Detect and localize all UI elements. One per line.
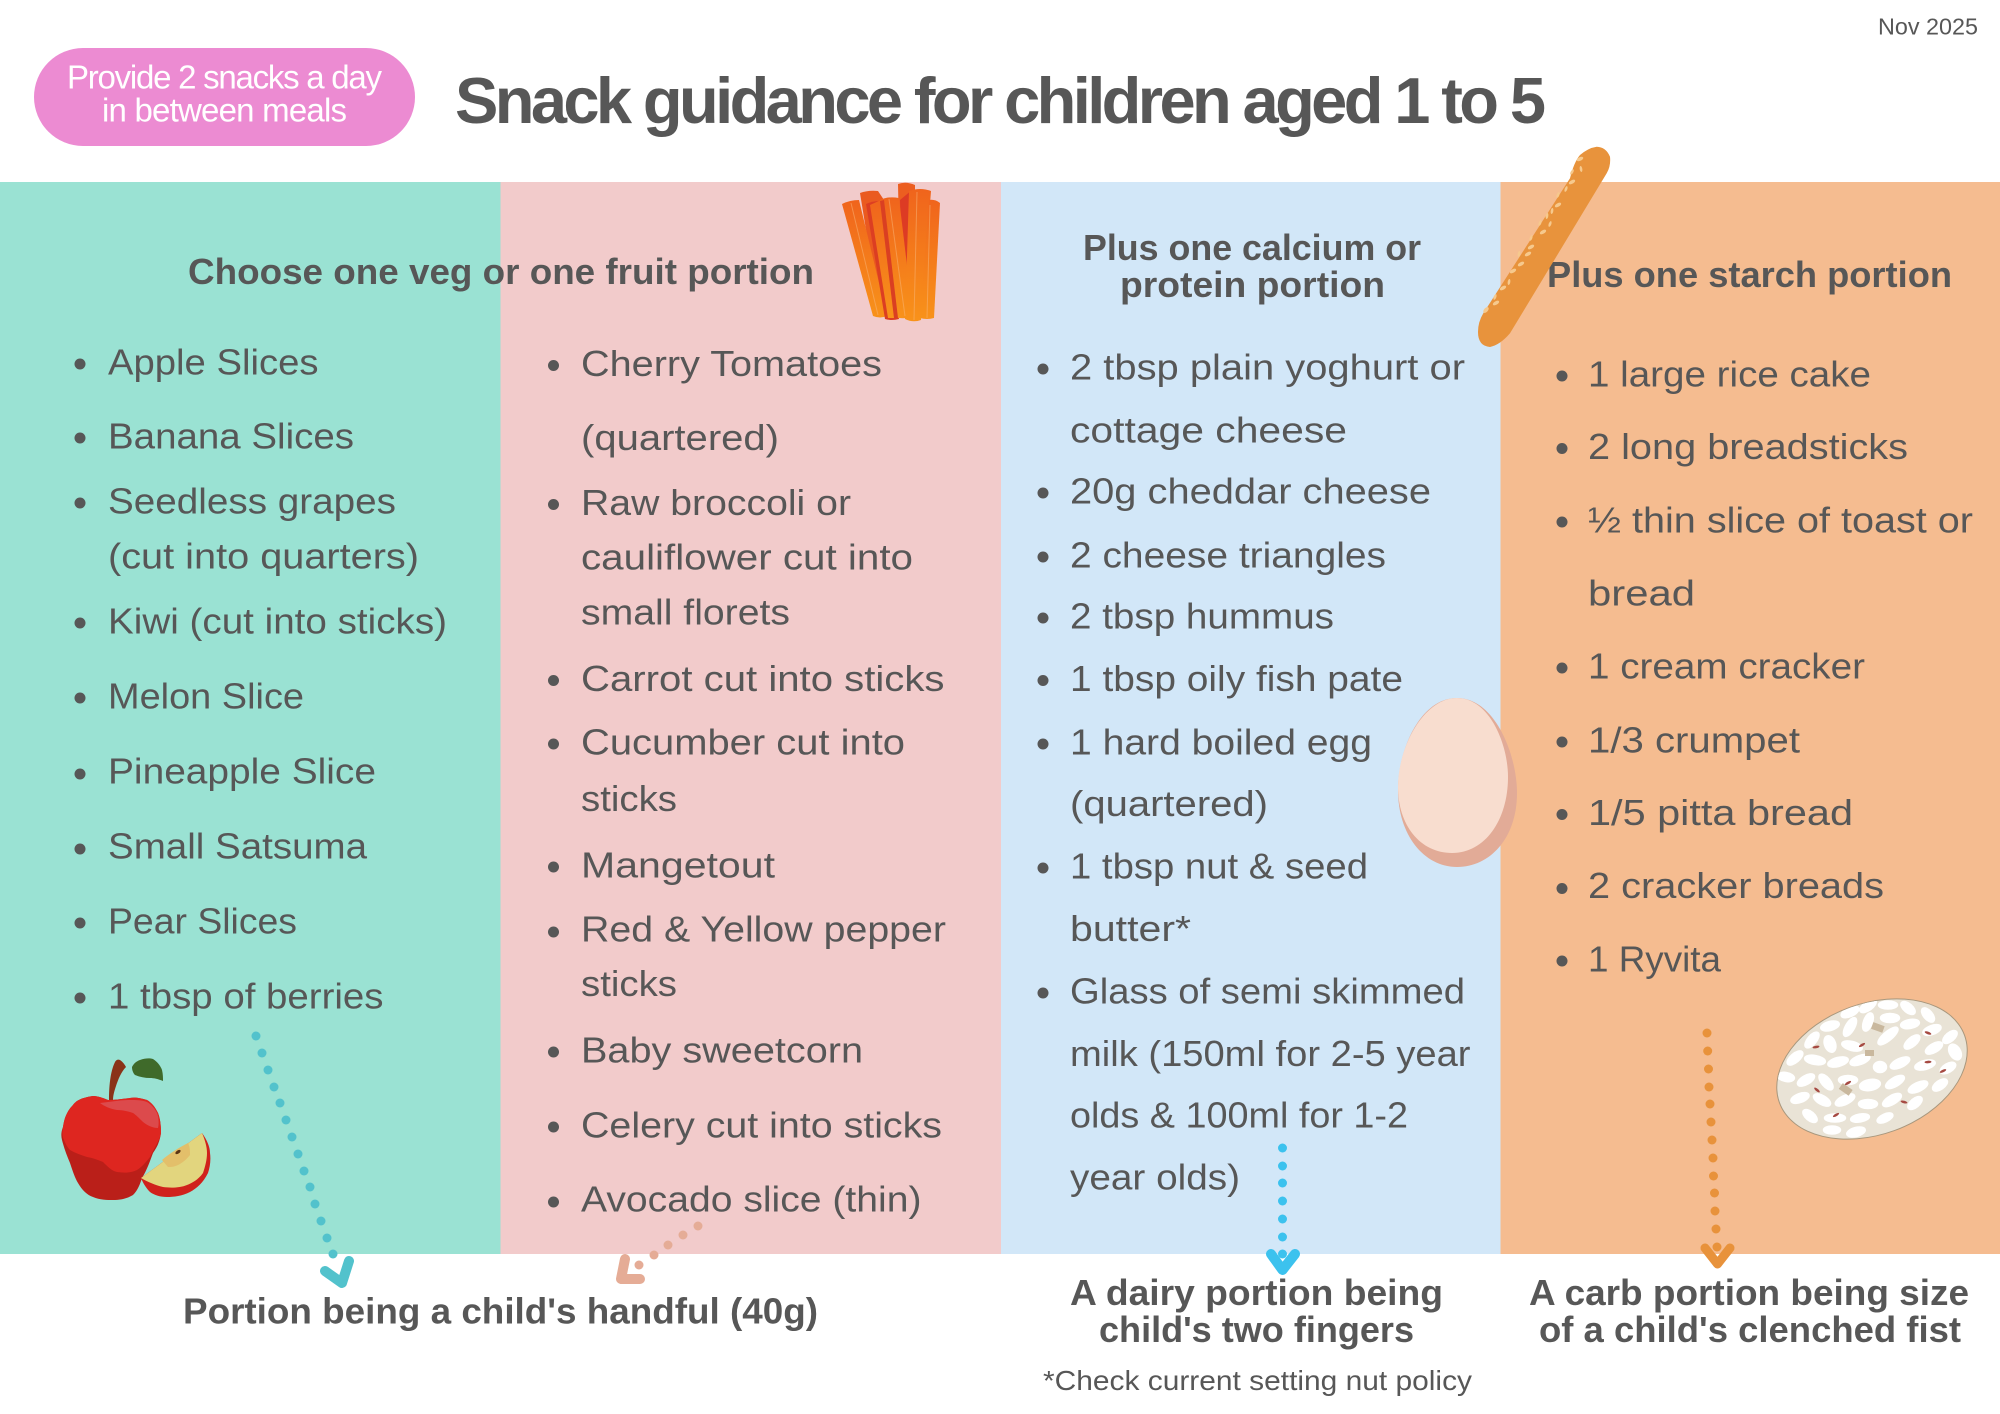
panel: vegetable portions: sticks [581,778,677,819]
panel: calcium or protein portions: (quartered) [1070,783,1268,824]
arrow: pink dotted [621,1222,702,1279]
panel: vegetable portions: (quartered) [581,417,779,458]
panel: starch portions: ½ thin slice of toast or [1588,500,1973,540]
icon: apple with slice [61,1058,210,1200]
panel: fruit portions [0,182,501,1254]
panel: fruit portions: 1 tbsp of berries [108,976,384,1016]
callout pill: provide 2 snacks a day: in between meals [102,92,347,128]
panel: vegetable portions: Red & Yellow pepper [581,908,946,950]
panel: starch portions: bread [1588,572,1695,614]
panel: calcium or protein portions: cottage cheese [1070,410,1347,450]
caption: carb portion: A carb portion being size [1529,1272,1969,1313]
arrow: blue dotted [1271,1144,1295,1270]
panel: starch portions: 1/5 pitta bread [1588,792,1853,833]
heading: veg or fruit: Choose one veg or one fruit portion [188,251,814,292]
panel: vegetable portions: Baby sweetcorn [581,1030,863,1070]
caption: carb portion [1529,1272,1969,1350]
panel: vegetable portions [500,182,1001,1254]
panel: calcium or protein portions: 20g cheddar cheese [1070,470,1431,512]
caption: dairy portion: child's two fingers [1099,1309,1414,1350]
icon: carrot sticks [842,183,940,321]
arrow: orange dotted [1702,1028,1730,1264]
panel: vegetable portions: Carrot cut into sticks [581,658,944,699]
panel: fruit portions: Pear Slices [108,900,297,942]
panel: fruit portions: Seedless grapes [108,480,396,522]
heading: calcium or protein: protein portion [1120,264,1385,305]
panel: calcium or protein portions: 1 tbsp oily fish pate [1070,658,1403,699]
panel: vegetable portions: Avocado slice (thin) [581,1178,922,1220]
panel: vegetable portions: Mangetout [581,844,775,886]
heading: calcium or protein: Plus one calcium or [1083,227,1421,268]
panel: fruit portions: Banana Slices [108,416,354,456]
panel: calcium or protein portions: 2 tbsp hummus [1070,596,1334,636]
panel: starch portions: 1/3 crumpet [1588,720,1800,760]
heading: calcium or protein [1083,227,1421,305]
panel: calcium or protein portions: 2 tbsp plain yoghurt or [1070,346,1465,388]
caption: carb portion: of a child's clenched fist [1539,1309,1961,1350]
panel: calcium or protein portions: Glass of semi skimmed [1070,970,1465,1012]
panel: vegetable portions: cauliflower cut into [581,536,913,578]
panel: calcium or protein portions: butter* [1070,908,1191,949]
panel: starch portions [1500,182,2000,1254]
date label: Nov 2025 [1878,14,1978,40]
title: Snack guidance for children aged 1 to 5 [455,64,1546,137]
panel: starch portions: 2 long breadsticks [1588,426,1908,467]
callout pill: provide 2 snacks a day: Provide 2 snacks a day [67,58,382,96]
caption: dairy portion [1070,1272,1443,1350]
heading: starch: Plus one starch portion [1547,254,1952,295]
footnote: nut policy: *Check current setting nut policy [1043,1365,1472,1396]
caption: handful portion: Portion being a child's handful (40g) [183,1290,818,1332]
icon: breadstick [1478,147,1610,347]
panel: vegetable portions: small florets [581,592,790,632]
icon: boiled egg [1398,698,1517,867]
panel: calcium or protein portions: 2 cheese triangles [1070,534,1386,576]
icon: rice cake [1776,998,1968,1140]
panel: starch portions: 1 cream cracker [1588,646,1865,686]
panel: calcium or protein portions: year olds) [1070,1156,1240,1198]
panel: fruit portions: Pineapple Slice [108,750,376,792]
panel: vegetable portions: Cucumber cut into [581,722,905,762]
panel: calcium or protein portions: 1 tbsp nut & seed [1070,846,1368,886]
panel: fruit portions: Apple Slices [108,342,318,382]
arrow: teal dotted [252,1032,349,1283]
panel: fruit portions: (cut into quarters) [108,536,419,576]
panel: vegetable portions: sticks [581,963,677,1004]
panel: starch portions: 1 large rice cake [1588,354,1871,394]
panel: calcium or protein portions: olds & 100ml for 1-2 [1070,1094,1408,1136]
panel: calcium or protein portions: 1 hard boiled egg [1070,722,1372,762]
caption: dairy portion: A dairy portion being [1070,1272,1443,1313]
panel: starch portions: 2 cracker breads [1588,865,1884,906]
panel: fruit portions: Kiwi (cut into sticks) [108,600,447,642]
panel: vegetable portions: Celery cut into sticks [581,1104,942,1146]
panel: fruit portions: Melon Slice [108,676,304,716]
panel: vegetable portions: Cherry Tomatoes [581,343,882,384]
panel: starch portions: 1 Ryvita [1588,938,1722,980]
callout pill: provide 2 snacks a day [34,48,415,146]
panel: calcium or protein portions [1001,182,1500,1254]
panel: calcium or protein portions: milk (150ml for 2-5 year [1070,1033,1471,1074]
panel: fruit portions: Small Satsuma [108,826,368,866]
panel: vegetable portions: Raw broccoli or [581,482,851,523]
